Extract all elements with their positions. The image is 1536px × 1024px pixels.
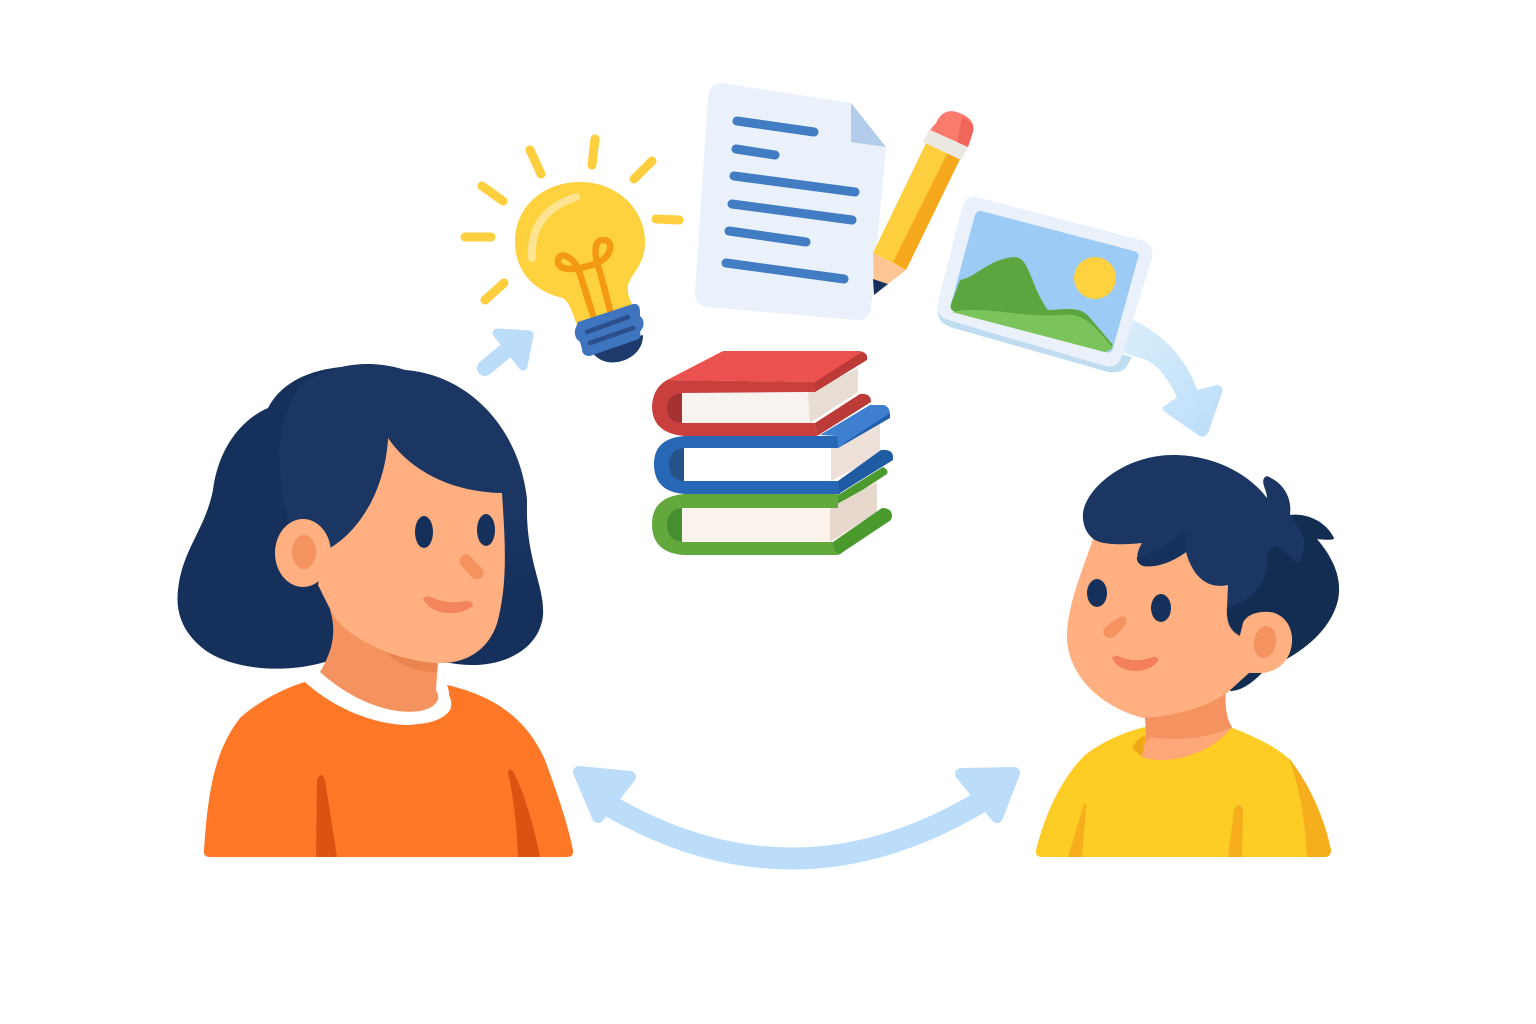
boy ear <box>1232 612 1292 673</box>
woman nose <box>466 561 477 573</box>
picture sun <box>1074 257 1116 299</box>
double arrow between figures <box>579 772 1014 859</box>
boy neck <box>1142 680 1232 760</box>
boy face <box>1067 530 1250 718</box>
bulb rays <box>465 139 679 300</box>
document icon <box>695 83 886 320</box>
woman ear <box>275 519 331 587</box>
boy mouth <box>1112 656 1158 671</box>
green book <box>652 467 892 555</box>
picture hills <box>951 257 1113 352</box>
document text lines <box>726 121 855 279</box>
stack of books <box>652 351 893 555</box>
boy nose <box>1103 617 1126 638</box>
woman eyes <box>415 514 495 548</box>
lightbulb icon <box>465 139 679 362</box>
picture card icon <box>937 197 1153 372</box>
bulb base <box>575 304 644 362</box>
woman shirt <box>204 682 573 857</box>
boy eyes <box>1087 579 1171 622</box>
curved arrow from picture to boy <box>1120 320 1222 437</box>
boy back hair <box>1222 510 1339 691</box>
pencil icon <box>873 111 973 295</box>
boy figure <box>1036 455 1339 857</box>
boy front hair <box>1083 455 1305 636</box>
red book <box>652 351 871 436</box>
boy shirt <box>1036 726 1331 857</box>
woman collar and neck <box>305 610 451 724</box>
woman face <box>318 438 505 663</box>
woman mouth <box>423 596 473 613</box>
woman figure <box>177 364 573 857</box>
boy hair shading <box>1137 531 1186 566</box>
blue book <box>654 405 893 494</box>
arrow to lightbulb <box>485 333 529 368</box>
